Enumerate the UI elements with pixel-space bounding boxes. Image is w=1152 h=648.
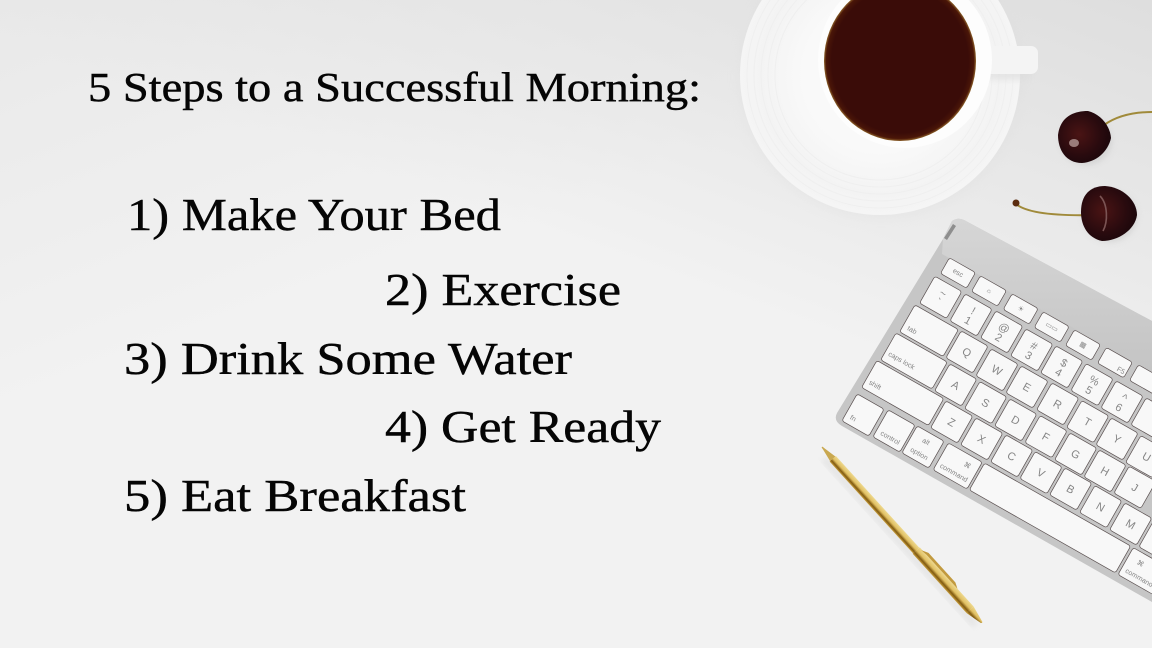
keys: ☀ (1016, 304, 1025, 314)
keys: F5 (1115, 366, 1126, 376)
keys: # (1028, 340, 1040, 354)
step 4: 4) Get Ready (385, 401, 661, 452)
keys: % (1087, 374, 1101, 389)
keys: alt (921, 437, 931, 447)
battery bar (942, 219, 1152, 372)
cherry: upper (1058, 111, 1152, 165)
keys: command (938, 463, 969, 484)
keys: G (1069, 448, 1082, 462)
keys: J (1129, 482, 1140, 495)
keys: 2 (993, 331, 1004, 345)
saucer (740, 0, 1021, 217)
keys: $ (1058, 357, 1069, 370)
function row: esc (951, 268, 965, 279)
step 1: 1) Make Your Bed (127, 189, 501, 240)
pen tip (819, 445, 835, 461)
keys: C (1005, 450, 1018, 464)
bottom row: fn (848, 414, 857, 423)
pen barrel (830, 456, 919, 553)
pen clip (921, 548, 959, 589)
number row: ~ (937, 287, 948, 301)
keys: ▦ (1078, 341, 1087, 350)
lower row (862, 361, 944, 425)
keyboard (836, 219, 1152, 602)
keys: @ (996, 321, 1011, 336)
keys: ☼ (984, 287, 993, 296)
keys: D (1009, 414, 1022, 428)
keys: V (1034, 467, 1047, 481)
title: 5 Steps to a Successful Morning: (88, 64, 701, 110)
home row (881, 333, 947, 389)
step 2: 2) Exercise (385, 264, 621, 315)
keys: X (975, 433, 988, 447)
keys: 3 (1023, 349, 1034, 363)
keys: W (989, 363, 1005, 379)
qwerty row (900, 305, 958, 357)
keys: T (1081, 416, 1093, 430)
keys: M (1123, 517, 1137, 532)
keys: Q (960, 346, 974, 360)
keys: option (909, 447, 929, 462)
number row: ` (933, 296, 942, 309)
coffee (824, 0, 976, 141)
keys: ^ (1119, 392, 1130, 405)
keys: 6 (1113, 401, 1124, 415)
keys: ⌘ (1135, 558, 1145, 569)
keys: ▭▭ (1044, 321, 1059, 334)
lower row: shift (867, 379, 882, 392)
keys: Z (945, 416, 957, 430)
qwerty row: tab (906, 325, 918, 336)
keys: 4 (1053, 366, 1064, 380)
keys: H (1098, 465, 1111, 479)
keys: A (949, 379, 962, 393)
cup handle (984, 46, 1038, 80)
home row: caps lock (887, 351, 916, 372)
keys: B (1064, 483, 1076, 497)
coffee cup on saucer (740, 0, 1038, 217)
keys: F (1040, 431, 1052, 445)
bottom row (842, 394, 884, 436)
keys: N (1094, 500, 1107, 515)
gold pen (815, 442, 988, 630)
keys: 5 (1083, 384, 1094, 398)
function row (941, 258, 975, 288)
keys: R (1051, 398, 1064, 412)
keys: Y (1110, 433, 1123, 447)
keys: ⌘ (962, 460, 972, 471)
keys: E (1020, 381, 1033, 395)
keyboard body (836, 219, 1152, 602)
cherry: lower (1012, 186, 1137, 242)
keys: 1 (962, 314, 973, 328)
step list (124, 189, 661, 521)
battery cap (944, 224, 956, 240)
step 3: 3) Drink Some Water (124, 333, 572, 384)
keys: ! (969, 306, 977, 317)
step 5: 5) Eat Breakfast (124, 470, 466, 521)
keys: control (879, 430, 901, 447)
number row (920, 276, 962, 318)
cup (818, 0, 992, 148)
keys (842, 258, 1152, 594)
keys: S (979, 397, 991, 411)
